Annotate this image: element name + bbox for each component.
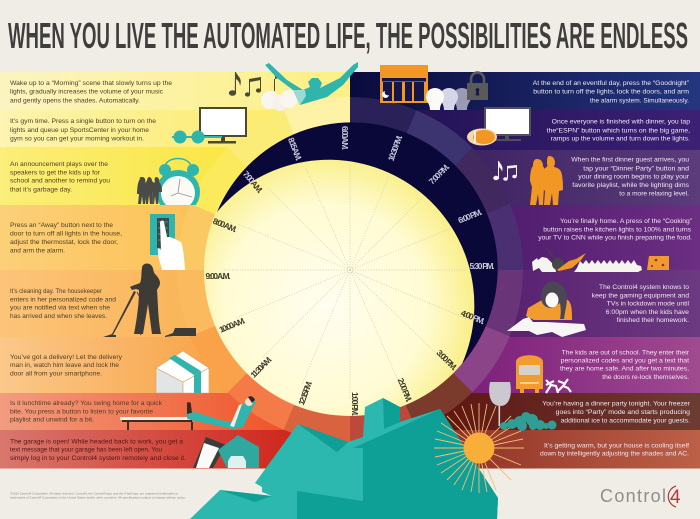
right text: ESPN <box>547 119 690 142</box>
left text: away: and arm the alarm. <box>10 247 65 254</box>
right text: cooking: You’re finally home. A press of the “Cooking” <box>560 218 692 225</box>
clock time labels: 8:15 A.M. <box>286 136 304 162</box>
left text: away: door to turn off all lights in the house, <box>10 231 122 238</box>
icon: family silhouettes <box>137 177 162 204</box>
icon: music notes <box>229 72 279 97</box>
left text: away <box>10 222 122 254</box>
clock time labels: 10:30 P.M. <box>386 134 404 162</box>
left text: delivery: You’ve got a delivery! Let the delivery <box>10 354 123 361</box>
house illustration <box>190 398 498 519</box>
left day bands <box>0 72 350 468</box>
icon: girl doing homework <box>507 281 586 337</box>
right text: ESPN: the“ESPN” button which turns on the big game, <box>547 127 690 134</box>
icon: sun <box>464 432 494 464</box>
icon: running kids <box>546 379 571 393</box>
right text: freezer: You’re having a dinner party tonight. Your freezer <box>542 400 691 407</box>
right text: dinner party: When the first dinner guest arrives, you <box>571 157 689 164</box>
left text: lunchtime: Is it lunchtime already? You swing home for a quick <box>10 400 163 407</box>
clock time labels: 8:00 A.M. <box>212 216 238 234</box>
right text: goodnight <box>533 80 690 104</box>
icon: dumbbell <box>172 130 222 144</box>
left text: gym: gym so you can get your morning workout in. <box>10 136 144 143</box>
left text: away: adjust the thermostat, lock the door, <box>10 239 118 246</box>
clock face <box>204 124 496 416</box>
right text: cooking: button raises the kitchen lights to 100% and turns <box>543 226 692 233</box>
icon: couple silhouette <box>530 156 563 205</box>
right night bands <box>350 72 700 468</box>
right text: school: personalized codes and you get a text that <box>561 358 689 365</box>
right text: freezer: goes into “Party” mode and starts producing <box>556 409 690 416</box>
logo: Control4: 4 <box>670 487 681 508</box>
left text: garage <box>10 438 186 462</box>
left text: cleaning: enters in her personalized code and <box>10 296 116 303</box>
right text: goodnight: At the end of an eventful day, press the “Goodnight” <box>533 80 689 87</box>
clock time labels: 1:00 P.M. <box>350 392 360 416</box>
right text: school <box>560 349 690 381</box>
clock outer ring segments <box>177 97 523 443</box>
clock time labels: 10:00 A.M. <box>218 315 246 335</box>
right text: ESPN: ramps up the volume and turn down the lights. <box>551 135 690 142</box>
icon: sunset rays <box>434 403 524 493</box>
clock spokes <box>222 164 470 400</box>
icon: ice pile <box>500 412 556 431</box>
right text: dinner party: tap your “Dinner Party” button and <box>583 165 689 172</box>
right text: dinner party: favorite playlist, while the lighting dims <box>572 182 690 189</box>
left text: garage: simply log in to your Control4 system remotely and close it. <box>10 455 186 462</box>
icon: cooking utensils and food <box>532 247 642 272</box>
icon: big game TV <box>485 108 530 141</box>
clock time labels: 7:00 P.M. <box>427 162 451 186</box>
icon: keypad and hand <box>150 214 185 270</box>
right text: gaming lockdown: 6:00pm when the kids have <box>606 309 689 316</box>
footnote: ©2014 Control4 Corporation. All rights reserved. Control4, the Control4 logo, and the 4-ball logo, are registered trademarks or <box>10 492 178 496</box>
right text: freezer: additional ice to accommodate your guests. <box>561 417 690 424</box>
left text: lunchtime: playlist and unwind for a bit. <box>10 417 94 424</box>
left text: gym <box>10 118 156 143</box>
right text: gaming lockdown: finished their homework. <box>617 317 689 324</box>
left text: cleaning: you are notified via text when she <box>10 305 110 312</box>
icon: gym TV <box>200 108 246 144</box>
right text: cooling <box>540 443 689 458</box>
left text: delivery: man in, watch him leave and lock the <box>10 362 119 369</box>
icon: housekeeper with vacuum <box>103 264 196 337</box>
clock time labels: 5:30 P.M. <box>470 261 494 271</box>
logo: Control4: Control <box>600 486 666 506</box>
left text: gym: lights and queue up SportsCenter in your home <box>10 127 149 134</box>
icon: padlock <box>467 72 488 100</box>
clock time labels: 7:00 A.M. <box>241 169 265 195</box>
icon: cheese <box>647 256 669 270</box>
clock time labels: 3:00 P.M. <box>435 348 459 372</box>
right text: gaming lockdown <box>592 284 690 324</box>
icon: football <box>467 128 497 146</box>
left text: announcement: school and another to remind you <box>10 178 110 185</box>
icon: wine glass <box>489 382 511 426</box>
clock time labels: 9:00 A.M. <box>206 271 230 281</box>
left text: morning scene: Wake up to a “Morning” scene that slowly turns up the <box>10 80 172 87</box>
icon: goodnight keypad <box>380 65 428 103</box>
clock time labels: 4:00 P.M. <box>460 308 486 326</box>
left text: garage: text message that your garage has been left open. You <box>10 447 162 454</box>
left text: announcement: speakers to get the kids up for <box>10 169 101 176</box>
clock time labels <box>206 126 494 416</box>
right text: dinner party <box>571 157 690 197</box>
left text: cleaning: It’s cleaning day. The housekeeper <box>10 288 103 295</box>
footnote: trademarks of Control4 Corporation in the United States and/or other countries. All specifications subject to change without notice. <box>10 496 186 500</box>
left text: announcement: An announcement plays over the <box>10 161 108 168</box>
clock time labels: 6:00 P.M. <box>457 207 483 225</box>
clock time labels: 12:15 P.M. <box>296 380 314 406</box>
night crescent <box>217 122 498 364</box>
right text: gaming lockdown: keep the gaming equipment and <box>592 292 689 299</box>
left text: cleaning: has arrived and when she leaves. <box>10 313 107 320</box>
icon: alarm clock <box>158 158 200 205</box>
icon: smartphone <box>193 437 226 468</box>
right text: ESPN: Once everyone is finished with dinner, you tap <box>552 119 690 126</box>
left text: lunchtime: bite. You press a button to listen to your favorite <box>10 408 153 415</box>
left text: announcement <box>10 161 110 193</box>
right text: school: they are home safe. And after two minutes, <box>560 366 689 373</box>
icon: waking person <box>261 62 358 111</box>
icon: school bus <box>516 355 543 393</box>
right text: goodnight: the alarm system. Simultaneously. <box>590 97 689 104</box>
footnote <box>10 492 186 500</box>
icon: relaxing man <box>120 396 256 430</box>
right text: gaming lockdown: The Control4 system knows to <box>599 284 689 291</box>
right text: cooking <box>538 218 692 242</box>
left text: delivery: door all from your smartphone. <box>10 371 102 378</box>
clock time labels: 6:00 A.M. <box>340 126 350 150</box>
icon: light bulbs <box>426 88 471 110</box>
right text: cooling: down by intelligently adjusting the shades and AC. <box>540 451 689 458</box>
icon: delivery box <box>156 351 209 393</box>
left text: cleaning <box>10 288 116 320</box>
left text: delivery <box>10 354 123 378</box>
left text: morning scene: and gently opens the shades. Automatically. <box>10 97 140 104</box>
right text: freezer <box>542 400 691 424</box>
right text: cooling: It’s getting warm, but your house is cooling itself <box>544 443 689 450</box>
right text: dinner party: to a more relaxing level. <box>619 190 689 197</box>
left text: announcement: that it’s garbage day. <box>10 186 72 193</box>
clock time labels: 11:30 A.M. <box>248 354 274 380</box>
left text: away: Press an “Away” button next to the <box>10 222 113 229</box>
left text: morning scene: lights, gradually increases the volume of your music <box>10 89 164 96</box>
left text: lunchtime <box>10 400 163 424</box>
icon: white music notes <box>493 161 517 181</box>
clock time labels: 2:00 P.M. <box>396 377 414 403</box>
right text: gaming lockdown: TVs in lockdown mode until <box>607 301 690 308</box>
right text: dinner party: your dining room begins to play your <box>578 174 690 181</box>
right text: cooking: your TV to CNN while you finish preparing the food. <box>538 235 692 242</box>
right text: school: the doors re-lock themselves. <box>602 374 689 381</box>
left text: gym: It’s gym time. Press a single button to turn on the <box>10 118 156 125</box>
right text: school: The kids are out of school. They enter their <box>562 349 690 356</box>
left text: garage: The garage is open! While headed back to work, you get a <box>10 438 183 445</box>
left text: morning scene <box>10 80 172 104</box>
right text: goodnight: button to turn off the lights, lock the doors, and arm <box>533 89 690 96</box>
icon: garage house and car <box>218 435 259 468</box>
